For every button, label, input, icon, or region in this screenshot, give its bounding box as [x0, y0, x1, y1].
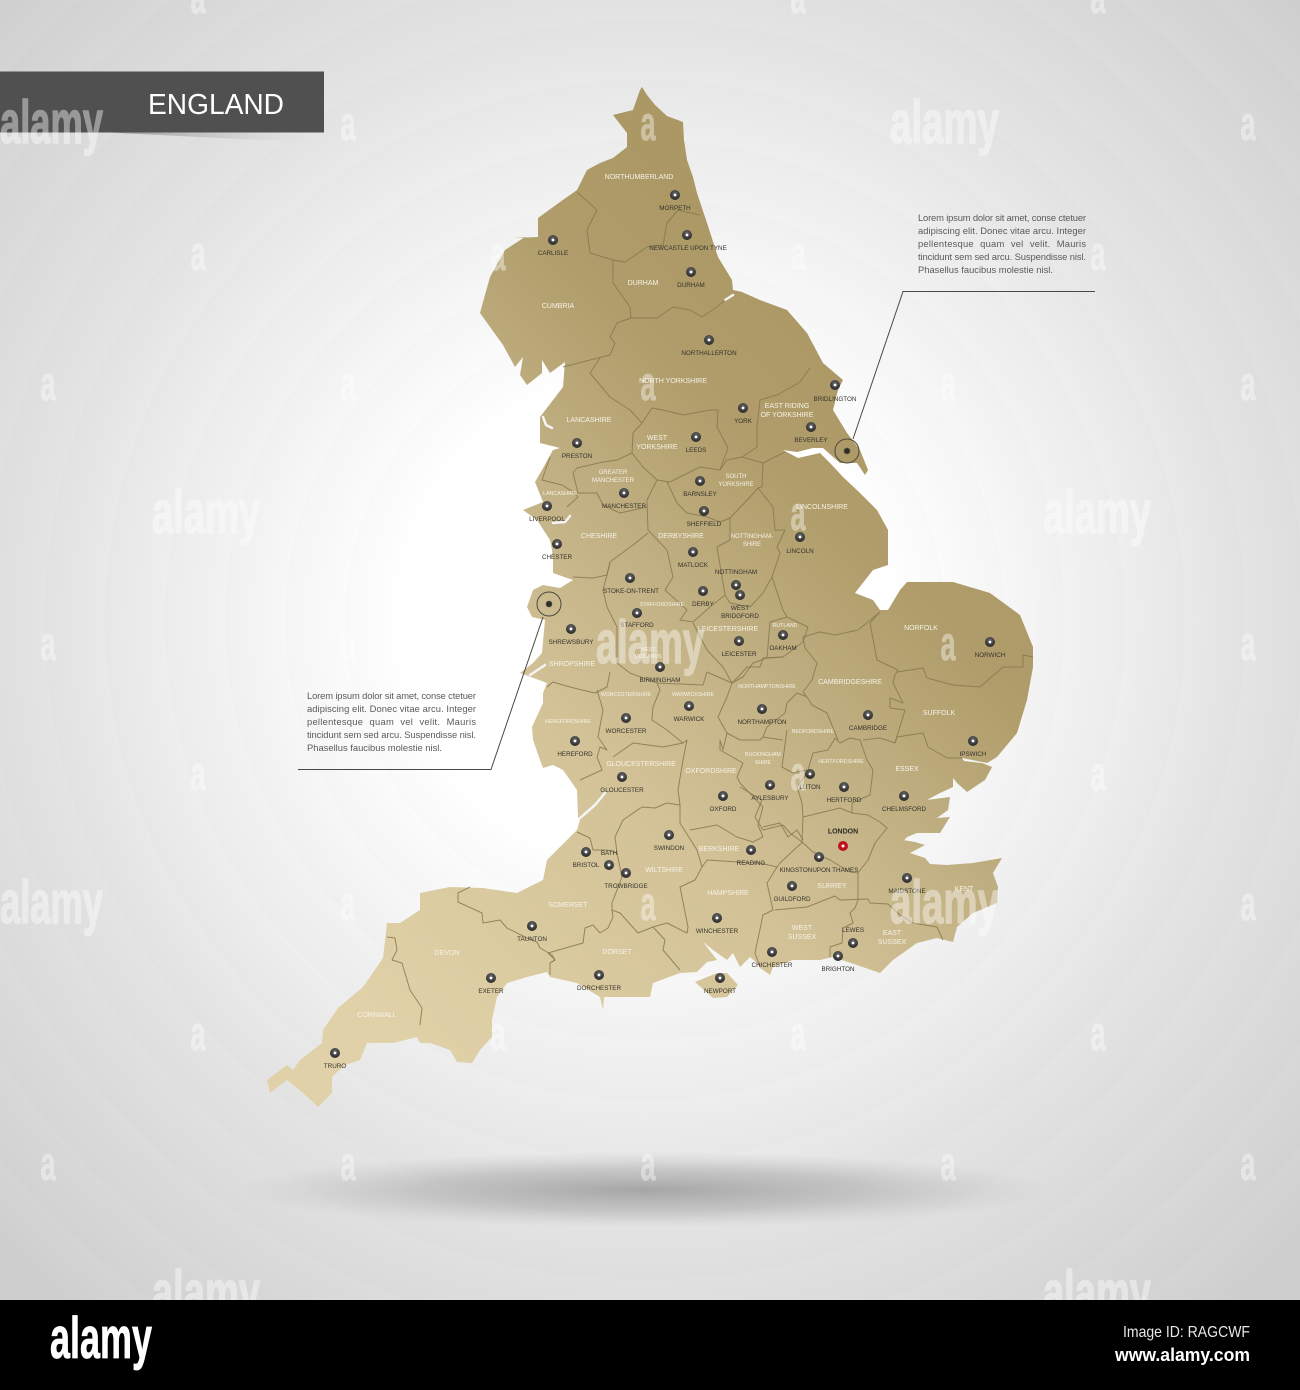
city: Nottingham — [715, 569, 757, 590]
city: Stafford — [620, 608, 654, 629]
county: Rutland: RUTLAND — [772, 623, 798, 629]
city: Truro — [324, 1048, 346, 1070]
stock photo watermarks: a — [790, 748, 806, 801]
stock photo watermarks: a — [940, 618, 956, 671]
city: Hertford — [827, 782, 862, 804]
stock photo watermarks: a — [490, 1008, 506, 1061]
stock photo watermarks: a — [190, 1008, 206, 1061]
callout text: tincidunt sem sed arcu. Suspendisse nisl. — [307, 729, 476, 740]
county: Hertfordshire: HERTFORDSHIRE — [818, 759, 864, 765]
city: Swindon: SWINDON — [654, 845, 685, 852]
city: Liverpool: LIVERPOOL — [529, 516, 565, 523]
stock photo watermarks: a — [490, 488, 506, 541]
city: Maidstone — [888, 873, 926, 895]
stock photo watermarks: a — [340, 618, 356, 671]
county: Bedfordshire: BEDFORDSHIRE — [792, 729, 835, 735]
city: Matlock — [678, 547, 709, 569]
county: Northamptonshire: NORTHAMPTONSHIRE — [738, 684, 796, 690]
city: York — [734, 403, 753, 425]
city: Cambridge — [849, 710, 887, 732]
city: Brighton — [821, 951, 855, 973]
county: Durham: DURHAM — [628, 280, 659, 287]
county: East Riding: EAST RIDING — [765, 403, 809, 410]
stock photo watermarks: a — [1090, 1008, 1106, 1061]
city: Morpeth — [659, 190, 691, 212]
city: Northampton — [737, 704, 787, 726]
title: ENGLAND — [148, 89, 284, 121]
city: Exeter — [478, 973, 504, 995]
city: Birmingham — [640, 662, 680, 684]
stock photo watermarks: a — [340, 98, 356, 151]
city: Kingston upon Thames — [780, 852, 858, 874]
county: Shropshire: SHROPSHIRE — [549, 661, 595, 668]
callout text: pellentesque quam vel velit. Mauris — [918, 238, 1086, 249]
city: Durham — [677, 267, 705, 289]
stock photo watermarks: a — [340, 1138, 356, 1191]
stock photo watermarks: a — [190, 748, 206, 801]
city: Chichester: CHICHESTER — [752, 962, 793, 969]
stock photo watermarks: a — [940, 1138, 956, 1191]
capital: London — [828, 828, 858, 851]
county: Buckinghamshire: BUCKINGHAM — [745, 752, 781, 758]
stock photo watermarks: a — [1090, 748, 1106, 801]
city: Liverpool — [529, 501, 565, 523]
city: Chester: CHESTER — [542, 554, 572, 561]
city markers — [324, 190, 1006, 1070]
county: Cornwall: CORNWALL — [357, 1012, 397, 1019]
city: Newcastle upon Tyne — [649, 230, 727, 252]
city: Newport — [704, 973, 736, 995]
city: Aylesbury: AYLESBURY — [751, 795, 789, 802]
city: Birmingham: BIRMINGHAM — [640, 677, 680, 684]
city: Luton: LUTON — [799, 784, 821, 791]
city: Taunton — [517, 921, 547, 943]
city: Reading — [737, 845, 765, 867]
city: Kingston upon Thames: KINGSTONUPON THAMES — [780, 867, 858, 874]
city: Chelmsford — [882, 791, 926, 813]
callout text: Phasellus faucibus molestie nisl. — [307, 742, 442, 753]
county: Surrey: SURREY — [817, 883, 847, 890]
city: Dorchester — [577, 970, 621, 992]
callout leader line and target — [298, 592, 561, 770]
city: Trowbridge — [604, 868, 648, 890]
city: Leicester — [722, 636, 757, 658]
city: Truro: TRURO — [324, 1063, 346, 1070]
city: Derby — [692, 586, 715, 608]
stock photo watermarks: a — [190, 228, 206, 281]
county: Nottinghamshire: SHIRE — [743, 542, 761, 548]
city: Hereford — [557, 736, 593, 758]
city: Exeter: EXETER — [478, 988, 504, 995]
stock photo watermarks: alamy — [1043, 1259, 1151, 1326]
city: Lincoln: LINCOLN — [786, 548, 814, 555]
city: Northallerton — [681, 335, 737, 357]
city: Beverley — [794, 422, 828, 444]
county: West Midlands: WEST — [640, 647, 656, 653]
city: West Bridgford: WEST — [731, 605, 749, 612]
stock photo watermarks: a — [790, 1008, 806, 1061]
callout text: Lorem ipsum dolor sit amet, conse ctetuer — [918, 212, 1086, 223]
city: Cambridge: CAMBRIDGE — [849, 725, 887, 732]
callout text: Lorem ipsum dolor sit amet, conse ctetuer — [307, 690, 476, 701]
city: Preston: PRESTON — [562, 453, 593, 460]
stock photo watermarks: alamy — [890, 89, 999, 156]
city: Guildford — [773, 881, 811, 903]
city: Leeds — [686, 432, 706, 454]
county: Cumbria: CUMBRIA — [542, 303, 574, 310]
city: Worcester — [606, 713, 647, 735]
city: Maidstone: MAIDSTONE — [888, 888, 926, 895]
callout text: tincidunt sem sed arcu. Suspendisse nisl. — [918, 251, 1086, 262]
city: Bristol — [573, 847, 600, 869]
county: Greater Manchester: GREATER — [599, 470, 627, 476]
stock photo watermarks: alamy — [152, 479, 260, 546]
county: Leicestershire: LEICESTERSHIRE — [698, 626, 758, 633]
landmass — [267, 87, 1033, 1107]
county: Hampshire: HAMPSHIRE — [707, 890, 749, 897]
stock photo watermarks: alamy — [890, 869, 999, 936]
capital: London: LONDON — [828, 828, 858, 836]
stock photo watermarks: a — [640, 358, 656, 411]
county: West Midlands: MIDLANDS — [634, 654, 662, 660]
county: Cambridgeshire: CAMBRIDGESHIRE — [818, 679, 882, 686]
county: South Yorkshire: SOUTH — [726, 474, 746, 480]
city: Taunton: TAUNTON — [517, 936, 547, 943]
city: Northallerton: NORTHALLERTON — [681, 350, 737, 357]
city: Shrewsbury: SHREWSBURY — [548, 639, 594, 646]
county: West Yorkshire: WEST — [647, 435, 667, 442]
county: East Sussex: EAST — [883, 930, 901, 937]
county: Derbyshire: DERBYSHIRE — [658, 533, 704, 540]
city: Northampton: NORTHAMPTON — [737, 719, 787, 726]
website: www.alamy.com — [1114, 1345, 1250, 1365]
county: Essex: ESSEX — [895, 766, 919, 773]
county: Nottinghamshire: NOTTINGHAM- — [731, 534, 773, 540]
city: Manchester: MANCHESTER — [602, 503, 646, 510]
stock photo watermarks: a — [40, 358, 56, 411]
county: West Sussex: WEST — [792, 925, 812, 932]
county: Buckinghamshire: SHIRE — [755, 760, 772, 766]
stock photo watermarks: alamy — [1043, 479, 1151, 546]
city: Chester — [542, 539, 572, 561]
city: Newport: NEWPORT — [704, 988, 736, 995]
image id: Image ID: RAGCWF — [1123, 1324, 1250, 1341]
city: Guildford: GUILDFORD — [773, 896, 811, 903]
callout text: adipiscing elit. Donec vitae arcu. Integer — [307, 703, 476, 714]
stock photo watermarks: a — [790, 488, 806, 541]
city: Swindon — [654, 830, 685, 852]
city: Morpeth: MORPETH — [659, 205, 691, 212]
city: Chelmsford: CHELMSFORD — [882, 806, 926, 813]
city: Preston — [562, 438, 593, 460]
city: Bristol: BRISTOL — [573, 862, 600, 869]
callout text — [918, 212, 1086, 275]
city: Sheffield — [687, 506, 722, 528]
stock photo watermarks: a — [1090, 228, 1106, 281]
stock photo watermarks: a — [490, 228, 506, 281]
county: Kent: KENT — [955, 886, 974, 893]
stock photo watermarks: a — [940, 358, 956, 411]
county: Lincolnshire: LINCOLNSHIRE — [796, 504, 848, 511]
city: Bridlington: BRIDLINGTON — [814, 396, 857, 403]
city: Durham: DURHAM — [677, 282, 705, 289]
callout leader line and target — [835, 292, 1095, 463]
city: Oxford — [710, 791, 737, 813]
stock photo watermarks: a — [1240, 618, 1256, 671]
city: Barnsley — [683, 476, 718, 498]
city: Lewes — [842, 927, 864, 948]
city: Gloucester — [600, 772, 644, 794]
county: Somerset: SOMERSET — [548, 902, 588, 909]
stock photo watermarks: alamy — [0, 869, 103, 936]
county: Staffordshire: STAFFORDSHIRE — [640, 602, 685, 608]
stock photo watermarks: a — [490, 748, 506, 801]
callout text — [307, 690, 476, 753]
city: Worcester: WORCESTER — [606, 728, 647, 735]
city: Oakham: OAKHAM — [769, 645, 797, 652]
city: Norwich — [975, 637, 1006, 659]
county: Suffolk: SUFFOLK — [923, 710, 955, 717]
stock photo watermarks: a — [40, 1138, 56, 1191]
city: Bath — [601, 850, 618, 870]
stock photo watermarks: alamy — [0, 89, 103, 156]
county: Dorset: DORSET — [602, 949, 632, 956]
callout: lower left — [298, 592, 561, 770]
city: Lewes: LEWES — [842, 927, 864, 934]
city: Ipswich — [960, 736, 987, 758]
county: Wiltshire: WILTSHIRE — [645, 867, 683, 874]
callout text: Phasellus faucibus molestie nisl. — [918, 264, 1053, 275]
city: Beverley: BEVERLEY — [794, 437, 828, 444]
callout text: pellentesque quam vel velit. Mauris — [307, 716, 476, 727]
county: Berkshire: BERKSHIRE — [699, 846, 740, 853]
city: Ipswich: IPSWICH — [960, 751, 987, 758]
county: Devon: DEVON — [435, 950, 459, 957]
city: Winchester: WINCHESTER — [696, 928, 739, 935]
county: East Riding: OF YORKSHIRE — [761, 412, 814, 419]
city: Carlisle: CARLISLE — [538, 250, 568, 257]
footer logo: alamy — [50, 1306, 152, 1371]
city: Warwick — [674, 701, 705, 723]
title banner — [0, 72, 324, 142]
city: Derby: DERBY — [692, 601, 715, 608]
county: West Sussex: SUSSEX — [788, 934, 817, 941]
county: Gloucestershire: GLOUCESTERSHIRE — [606, 761, 676, 768]
stock photo watermarks: a — [340, 358, 356, 411]
footer bar — [0, 1300, 1300, 1390]
city: Bridlington — [814, 380, 857, 403]
city: Stoke-on-Trent — [603, 573, 659, 595]
city: Oakham — [769, 630, 797, 652]
county: Herefordshire: HEREFORDSHIRE — [545, 719, 591, 725]
county: Greater Manchester: MANCHESTER — [592, 478, 635, 484]
stock photo watermarks: a — [1240, 878, 1256, 931]
city: Trowbridge: TROWBRIDGE — [604, 883, 648, 890]
city: Carlisle — [538, 235, 568, 257]
estuaries and water inlets — [530, 295, 733, 818]
county: Oxfordshire: OXFORDSHIRE — [685, 768, 737, 775]
city: Reading: READING — [737, 860, 765, 867]
city: Winchester — [696, 913, 739, 935]
city: Leicester: LEICESTER — [722, 651, 757, 658]
city: Hertford: HERTFORD — [827, 797, 862, 804]
city: Sheffield: SHEFFIELD — [687, 521, 722, 528]
county: West Yorkshire: YORKSHIRE — [636, 444, 678, 451]
city: West Bridgford — [721, 590, 759, 620]
city: Lincoln — [786, 532, 814, 555]
city: Stafford: STAFFORD — [620, 622, 654, 629]
city: Leeds: LEEDS — [686, 447, 706, 454]
city: Stoke-on-Trent: STOKE-ON-TRENT — [603, 588, 659, 595]
county: Cheshire: CHESHIRE — [581, 533, 617, 540]
stock photo watermarks: a — [640, 1138, 656, 1191]
county labels — [357, 174, 974, 1019]
stock photo watermarks: a — [40, 618, 56, 671]
city: Norwich: NORWICH — [975, 652, 1006, 659]
city: Barnsley: BARNSLEY — [683, 491, 718, 498]
city: Dorchester: DORCHESTER — [577, 985, 621, 992]
callout: upper right — [835, 212, 1095, 463]
county: Lancashire: LANCASHIRE — [567, 417, 612, 424]
county: Warwickshire: WARWICKSHIRE — [672, 692, 715, 698]
stock photo watermarks: a — [640, 878, 656, 931]
county: Merseyside area: LANCASHIRE — [543, 491, 577, 497]
stock photo watermarks: alamy — [596, 609, 704, 676]
stock photo watermarks: a — [1240, 1138, 1256, 1191]
city: Nottingham: NOTTINGHAM — [715, 569, 757, 576]
city: Newcastle upon Tyne: NEWCASTLE UPON TYNE — [649, 245, 727, 252]
county: South Yorkshire: YORKSHIRE — [718, 482, 754, 488]
city: Oxford: OXFORD — [710, 806, 737, 813]
stock photo watermarks: a — [1240, 98, 1256, 151]
stock photo watermarks: alamy — [152, 1259, 260, 1326]
stock photo watermarks: a — [640, 98, 656, 151]
county: Norfolk: NORFOLK — [904, 625, 938, 632]
city: Hereford: HEREFORD — [557, 751, 593, 758]
county: East Sussex: SUSSEX — [878, 939, 907, 946]
city: Shrewsbury — [548, 624, 594, 646]
city: Luton — [799, 769, 821, 791]
city: West Bridgford: BRIDGFORD — [721, 613, 759, 620]
stock photo watermarks: a — [340, 878, 356, 931]
city: Manchester — [602, 488, 646, 510]
stock photo watermarks: a — [1240, 358, 1256, 411]
city: York: YORK — [734, 418, 753, 425]
stock photo watermarks: a — [790, 228, 806, 281]
county: North Yorkshire: NORTH YORKSHIRE — [639, 378, 707, 385]
county: Northumberland: NORTHUMBERLAND — [605, 174, 673, 181]
city: Chichester — [752, 947, 793, 969]
map drop shadow — [235, 1152, 1055, 1228]
city: Brighton: BRIGHTON — [821, 966, 855, 973]
county borders — [387, 192, 1033, 1025]
callout text: adipiscing elit. Donec vitae arcu. Integer — [918, 225, 1086, 236]
city: Warwick: WARWICK — [674, 716, 705, 723]
county: Worcestershire: WORCESTERSHIRE — [601, 692, 652, 698]
city: Bath: BATH — [601, 850, 618, 857]
city: Matlock: MATLOCK — [678, 562, 709, 569]
city: Gloucester: GLOUCESTER — [600, 787, 644, 794]
map of England — [267, 87, 1033, 1107]
city: Aylesbury — [751, 780, 789, 802]
